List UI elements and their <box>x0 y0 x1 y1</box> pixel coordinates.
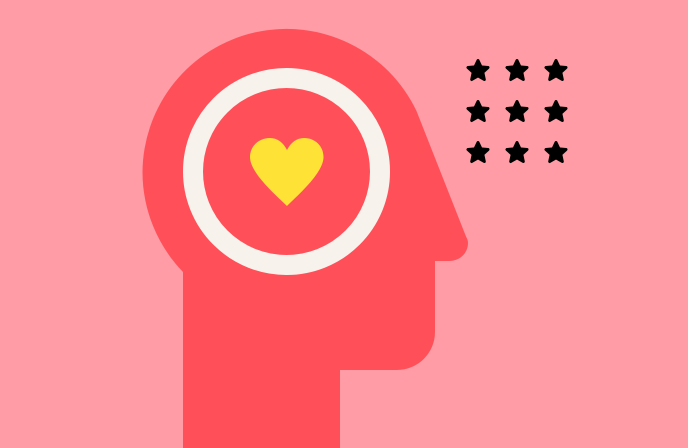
icon: star 9 <box>546 142 566 162</box>
ring <box>193 78 380 265</box>
head silhouette <box>142 29 468 448</box>
icon: star 1 <box>468 60 488 80</box>
icon: star 3 <box>546 60 566 80</box>
icon: star 7 <box>468 142 488 162</box>
icon: star 6 <box>546 102 566 120</box>
star grid <box>468 60 566 162</box>
icon: star 8 <box>507 142 527 162</box>
icon: heart <box>250 138 324 206</box>
icon: star 2 <box>507 60 527 80</box>
icon: star 5 <box>507 102 527 120</box>
icon: star 4 <box>468 102 488 120</box>
